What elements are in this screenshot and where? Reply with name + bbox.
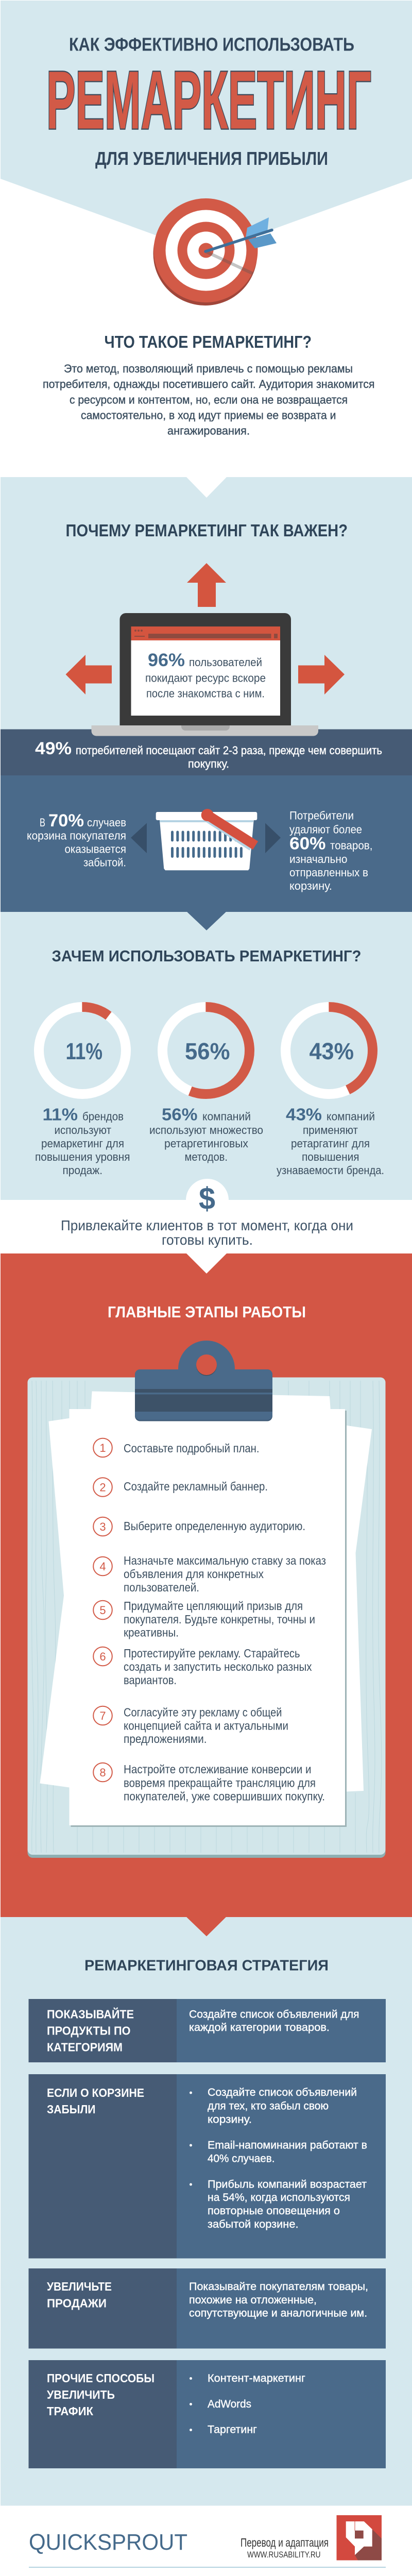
strategy row 4: Контент-маркетинг (208, 2372, 305, 2384)
triangle right (265, 823, 281, 853)
caption 56%: используют множество (149, 1124, 263, 1137)
callout: attract customers (61, 1217, 353, 1248)
step 8: Настройте отслеживание конверсии и (124, 1762, 311, 1776)
caption 11%: повышения уровня (35, 1150, 130, 1163)
paper sheets (40, 1391, 372, 1827)
strategy row 2: забытой корзине. (208, 2218, 299, 2230)
strategy row 2: ЕСЛИ О КОРЗИНЕ (47, 2086, 144, 2099)
donut chart 56% (163, 1007, 249, 1094)
caption 56%: методов. (184, 1150, 228, 1163)
caption 56%: компаний (202, 1110, 251, 1123)
stat text (76, 744, 382, 770)
stat: 60% text: корзину. (289, 879, 332, 892)
caption 11%: брендов (82, 1110, 124, 1123)
step 1: 1 (99, 1442, 106, 1454)
triangle left (131, 823, 147, 853)
step 4 (93, 1554, 326, 1594)
strategy row 4: AdWords (208, 2398, 251, 2410)
stat text: потребителей посещают сайт 2-3 раза, прежде чем совершить (76, 744, 382, 757)
strategy row 3: похожие на отложенные, (189, 2294, 317, 2306)
strategy row 4: УВЕЛИЧИТЬ (47, 2388, 115, 2401)
caption 11%: ремаркетинг для (41, 1137, 124, 1150)
step 5: креативны. (124, 1626, 179, 1639)
step 8 (93, 1762, 325, 1803)
step 4: пользователей. (124, 1581, 199, 1594)
icon: dollar badge (186, 1179, 229, 1216)
icon: dollar badge: $ (199, 1181, 215, 1216)
heading: ЧТО ТАКОЕ РЕМАРКЕТИНГ? (104, 332, 312, 351)
strategy row 1 (29, 1999, 386, 2062)
donut chart 43%: 43% (309, 1038, 354, 1064)
strategy row 2: Email-напоминания работают в (208, 2139, 367, 2151)
strategy row 2: Прибыль компаний возрастает (208, 2178, 367, 2191)
caption 11%: продаж. (63, 1164, 102, 1177)
step 8: покупателей, уже совершивших покупку. (124, 1790, 325, 1803)
stat: 60% text (289, 809, 373, 892)
paragraph: ангажирования. (167, 425, 250, 437)
strategy row 1: ПОКАЗЫВАЙТЕ (47, 2007, 134, 2021)
strategy row 2: 40% случаев. (208, 2153, 275, 2165)
caption 56%: ретаргетинговых (164, 1137, 249, 1150)
caption 56% (149, 1105, 263, 1163)
strategy row 2: повторные оповещения о (208, 2205, 340, 2217)
step 6: 6 (99, 1650, 106, 1663)
paragraph: потребителя, однажды посетившего сайт. Аудитория знакомится (43, 378, 375, 391)
stat: 49%: 49% (35, 739, 72, 758)
panel: why remarketing matters (1, 477, 412, 730)
step 5: 5 (99, 1604, 106, 1617)
logo text: Quicksprout: QUICKSPROUT (29, 2530, 187, 2555)
heading: РЕМАРКЕТИНГОВАЯ СТРАТЕГИЯ (84, 1958, 329, 1974)
clipboard board (28, 1378, 385, 1858)
stat: 60% text: 60% (289, 834, 325, 853)
paragraph (43, 362, 375, 437)
heading: ГЛАВНЫЕ ЭТАПЫ РАБОТЫ (108, 1303, 306, 1321)
caption 43%: 43% (286, 1105, 322, 1124)
stat: 70% text: случаев (87, 816, 126, 829)
laptop text: после знакомства с ним. (146, 687, 265, 700)
panel: basket stats (1, 775, 412, 930)
light band with notch (1, 477, 412, 730)
step 3: 3 (99, 1520, 106, 1533)
caption 43%: узнаваемости бренда. (277, 1164, 384, 1177)
stat: 70% text: 70% (48, 811, 84, 831)
arrow right (298, 655, 345, 694)
header panel (1, 1, 412, 253)
step 8: вовремя прекращайте трансляцию для (124, 1776, 316, 1790)
arrow left (66, 655, 112, 694)
step 4: объявления для конкретных (124, 1567, 264, 1581)
step 2: Создайте рекламный баннер. (124, 1480, 268, 1493)
stat: 96%: 96% (148, 650, 185, 670)
caption 43%: компаний (327, 1110, 375, 1123)
strategy row 3: Показывайте покупателям товары, (189, 2280, 368, 2293)
step 3 (93, 1517, 305, 1536)
callout: attract customers: готовы купить. (162, 1232, 253, 1248)
step 1 (93, 1438, 259, 1457)
caption 43%: применяют (303, 1124, 358, 1137)
step 6: Протестируйте рекламу. Старайтесь (124, 1647, 300, 1660)
laptop text (145, 656, 266, 700)
translation credit (241, 2536, 329, 2560)
strategy row 3 (29, 2268, 386, 2348)
donut chart 11%: 11% (66, 1038, 102, 1064)
step 6 (93, 1647, 312, 1687)
strategy row 2: ЗАБЫЛИ (47, 2103, 96, 2116)
icon: target with arrow (153, 198, 277, 306)
panel: main steps (1, 1253, 412, 1936)
title line 1: КАК ЭФФЕКТИВНО ИСПОЛЬЗОВАТЬ (69, 34, 354, 55)
icon: laptop (92, 613, 318, 736)
footer rule (29, 2567, 386, 2568)
laptop text: пользователей (189, 656, 262, 669)
header chevron background (1, 1, 412, 253)
paragraph: с ресурсом и контентом, но, если она не возвращается (70, 394, 348, 406)
clipboard clip (135, 1341, 272, 1421)
step 5: Придумайте цепляющий призыв для (124, 1599, 303, 1613)
step 1: Составьте подробный план. (124, 1442, 260, 1455)
strategy row 1: ПРОДУКТЫ ПО (47, 2024, 131, 2037)
caption 43% (277, 1105, 384, 1177)
strategy row 3: сопутствующие и аналогичные им. (189, 2307, 367, 2319)
caption 43%: ретаргатинг для (291, 1137, 370, 1150)
strategy row 2: на 54%, когда используются (208, 2191, 350, 2204)
stat: 70% text: корзина покупателя (27, 829, 126, 842)
step 7: концепцией сайта и актуальными (124, 1719, 288, 1732)
caption 43%: повышения (302, 1150, 359, 1163)
step 7: 7 (99, 1709, 106, 1722)
stat: 60% text: удаляют более (289, 823, 362, 836)
translation credit: WWW.RUSABILITY.RU (247, 2550, 320, 2560)
stat: 70% text: оказывается (65, 843, 126, 855)
title line 3: ДЛЯ УВЕЛИЧЕНИЯ ПРИБЫЛИ (95, 148, 328, 169)
strategy row 2: корзину. (208, 2113, 252, 2126)
laptop text: покидают ресурс вскоре (145, 672, 266, 684)
icon: shopping basket (156, 809, 257, 870)
stat: 70% text: забытой. (83, 856, 126, 869)
strategy row 2: для тех, кто забыл свою (208, 2100, 329, 2112)
caption 11%: используют (55, 1124, 111, 1137)
donut chart 56%: 56% (185, 1038, 230, 1064)
step 8: 8 (99, 1766, 106, 1779)
paragraph: самостоятельно, в ход идут приемы ее возврата и (81, 409, 336, 421)
strategy row 3: УВЕЛИЧЬТЕ (47, 2280, 112, 2293)
arrow up (187, 563, 226, 607)
translation credit: Перевод и адаптация (241, 2536, 329, 2549)
step 3: Выберите определенную аудиторию. (124, 1519, 305, 1533)
step 2: 2 (99, 1481, 106, 1494)
strategy row 1: Создайте список объявлений для (189, 2008, 359, 2021)
paragraph: Это метод, позволяющий привлечь с помощью рекламы (64, 362, 353, 375)
strategy row 1: КАТЕГОРИЯМ (47, 2040, 123, 2054)
stat: 60% text: товаров, (330, 839, 373, 852)
heading: ЗАЧЕМ ИСПОЛЬЗОВАТЬ РЕМАРКЕТИНГ? (52, 947, 362, 965)
strategy row 3: ПРОДАЖИ (47, 2297, 107, 2310)
step 5 (93, 1599, 315, 1639)
strategy row 4: ПРОЧИЕ СПОСОБЫ (47, 2371, 154, 2385)
stat: 60% text: Потребители (289, 809, 354, 822)
strategy row 1: каждой категории товаров. (189, 2021, 330, 2033)
panel: why use remarketing (1, 912, 412, 1200)
callout: attract customers: Привлекайте клиентов в тот момент, когда они (61, 1217, 353, 1233)
strategy row 4: ТРАФИК (47, 2404, 94, 2418)
step 2 (93, 1478, 268, 1497)
stat: 70% text: В (40, 816, 45, 829)
footer (29, 2515, 386, 2568)
step 6: вариантов. (124, 1673, 177, 1687)
heading: ПОЧЕМУ РЕМАРКЕТИНГ ТАК ВАЖЕН? (66, 521, 348, 540)
caption 11% (35, 1105, 130, 1177)
stat: 60% text: отправленных в (289, 866, 368, 879)
strategy row 4 (29, 2360, 386, 2468)
strategy row 4: Таргетинг (208, 2424, 257, 2436)
step 4: Назначьте максимальную ставку за показ (124, 1554, 326, 1567)
strategy row 2: Создайте список объявлений (208, 2086, 357, 2098)
donut chart 11% (39, 1007, 126, 1094)
step 7 (93, 1705, 288, 1745)
section: what is remarketing (43, 332, 375, 437)
stat: 70% text (27, 811, 126, 869)
panel: remarketing strategy (1, 1917, 412, 2506)
step 7: Согласуйте эту рекламу с общей (124, 1705, 282, 1719)
panel: dark stat band (1, 730, 412, 776)
donut chart 43% (285, 1007, 373, 1094)
step 6: создать и запустить несколько разных (124, 1660, 312, 1673)
step 4: 4 (99, 1560, 106, 1573)
caption 56%: 56% (162, 1105, 198, 1124)
stat text: покупку. (188, 757, 229, 770)
step 7: предложениями. (124, 1732, 207, 1745)
strategy row 2 (29, 2074, 386, 2259)
caption 11%: 11% (42, 1105, 78, 1124)
step 5: покупателя. Будьте конкретны, точны и (124, 1613, 315, 1626)
logo icon: Rusability (337, 2515, 382, 2561)
stat: 60% text: изначально (289, 853, 347, 866)
